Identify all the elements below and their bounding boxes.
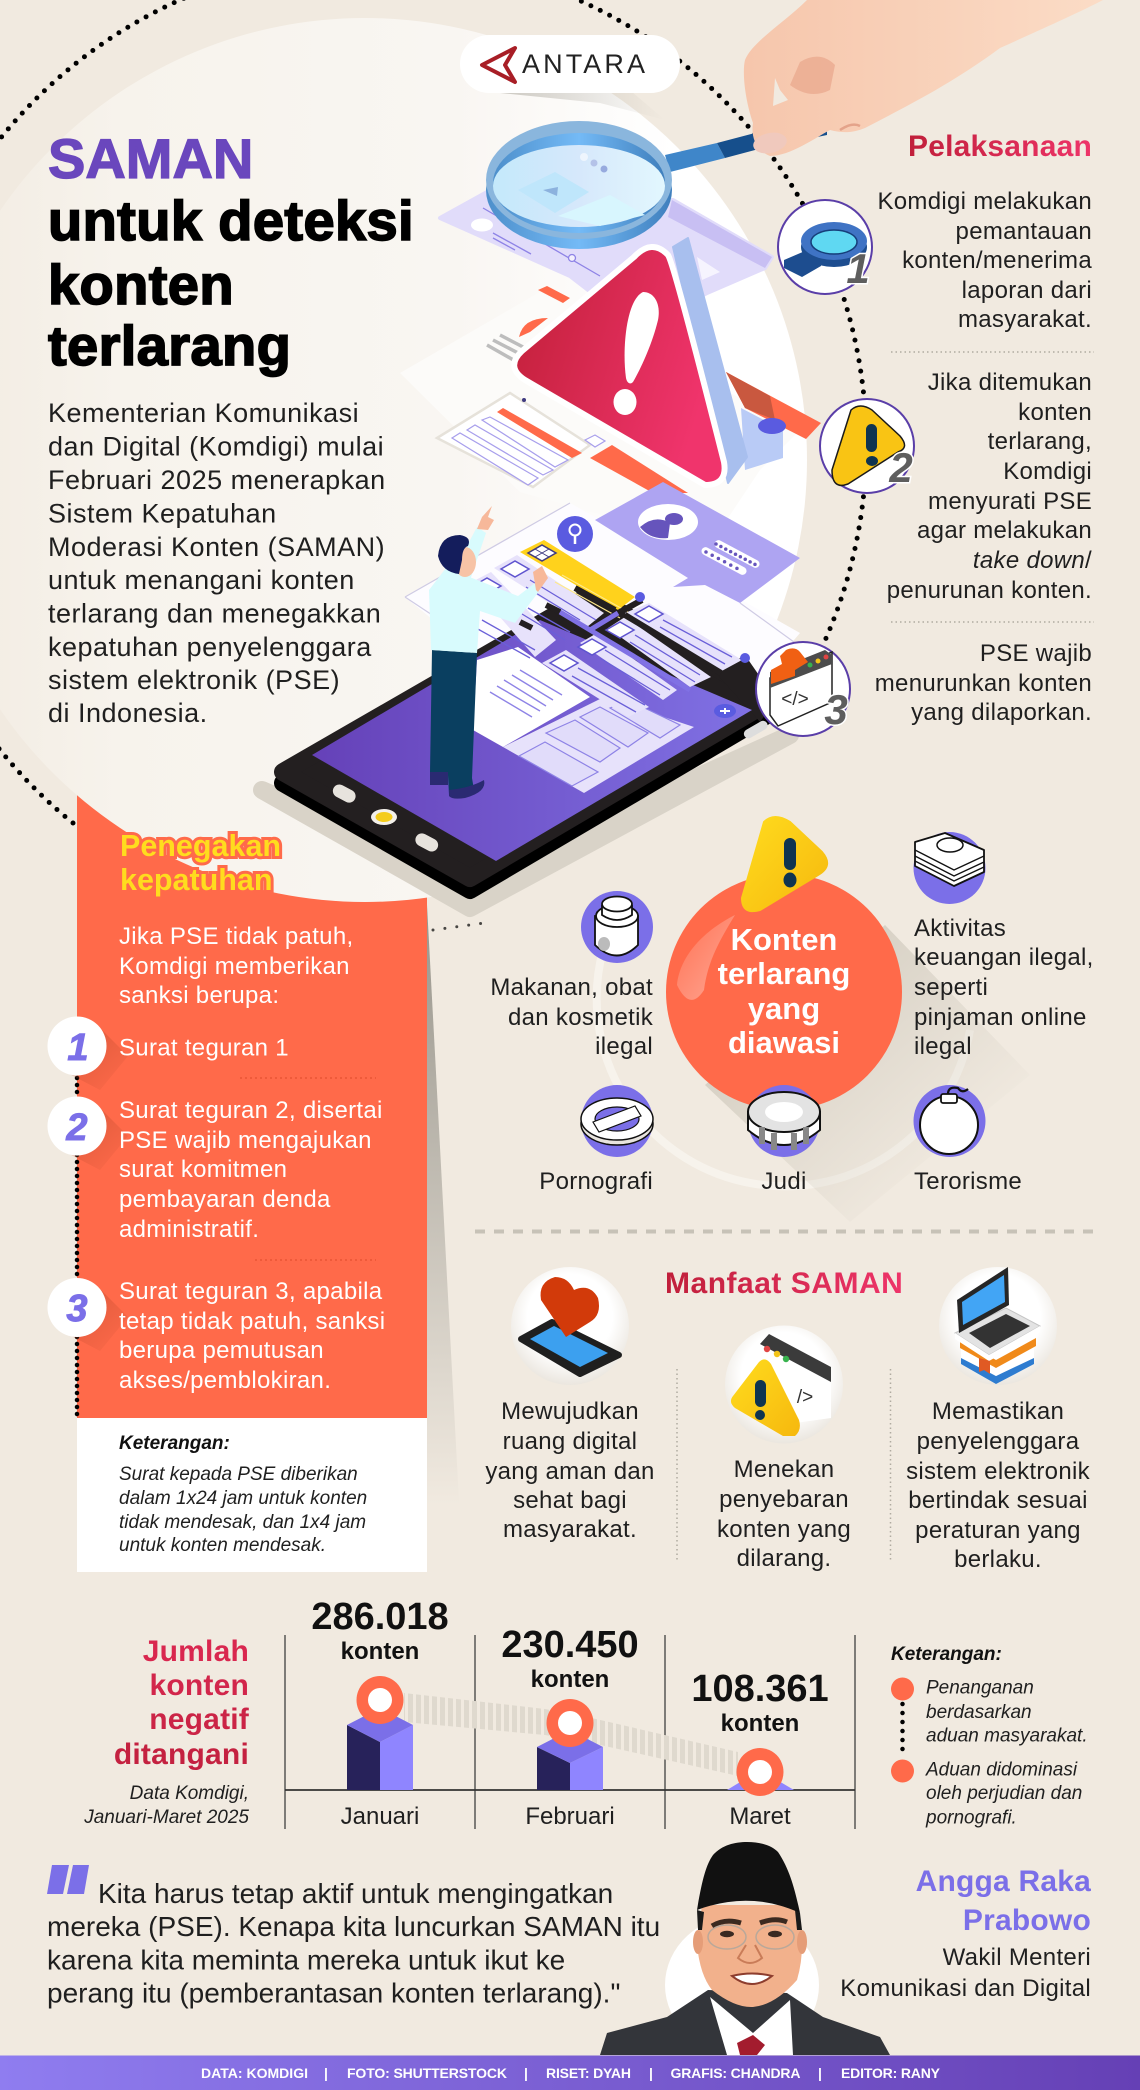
benefit 3: berlaku.: [954, 1546, 1042, 1573]
footer credits: GRAFIS: CHANDRA: [670, 2065, 800, 2081]
bar: maret: [691, 1668, 829, 1830]
text: pelaksanaan step 3: menurunkan konten: [875, 670, 1092, 697]
large light circle behind illustration: [0, 18, 807, 902]
legend: keterangan: oleh perjudian dan: [926, 1783, 1082, 1804]
connectors: [520, 588, 721, 673]
benefit 2: konten yang: [717, 1516, 851, 1543]
benefit 3: [906, 1267, 1091, 1573]
sanction 3: berupa pemutusan: [119, 1337, 324, 1364]
keterangan box: Surat kepada PSE diberikan: [119, 1464, 358, 1485]
intro text block: Februari 2025 menerapkan: [48, 465, 386, 495]
text: pelaksanaan step 2: agar melakukan: [917, 517, 1092, 544]
dotted arc: [0, 0, 866, 930]
heading: penegakan kepatuhan: kepatuhan: [120, 863, 273, 897]
lavender card rows: [470, 555, 742, 717]
logo: ANTARA pill: ANTARA: [522, 49, 648, 79]
sanction 2: PSE wajib mengajukan: [119, 1127, 372, 1154]
illustration: phone, warning and interface layers: [262, 192, 821, 908]
text: pelaksanaan step 1: pemantauan: [956, 218, 1092, 245]
bar: februari: 230.450: [501, 1624, 639, 1666]
icon: step 1 magnifier: [778, 200, 872, 294]
benefit 1: [485, 1267, 655, 1543]
category: judi: [748, 1085, 820, 1195]
footer credits: FOTO: SHUTTERSTOCK: [347, 2065, 507, 2081]
benefit 2: penyebaran: [719, 1486, 849, 1513]
speaker name and role: Angga Raka: [916, 1865, 1091, 1898]
text: pelaksanaan step 3: yang dilaporkan.: [911, 699, 1092, 726]
footer credits: |: [649, 2065, 653, 2081]
keterangan box: tidak mendesak, dan 1x4 jam: [119, 1512, 366, 1533]
phone body: [283, 606, 772, 890]
text: data source: Data Komdigi,: [130, 1783, 249, 1804]
sanction 3: Surat teguran 3, apabila: [119, 1278, 383, 1305]
category: makanan, obat, kosmetik: [490, 891, 654, 1060]
text: pelaksanaan step 3: [875, 640, 1092, 726]
icon: step 3 takedown: 3: [824, 686, 848, 733]
speaker name and role: Prabowo: [963, 1904, 1091, 1937]
legend: keterangan: Aduan didominasi: [925, 1760, 1078, 1780]
central circle: konten terlarang: diawasi: [728, 1025, 840, 1060]
sanction 3: akses/pemblokiran.: [119, 1367, 331, 1394]
category: makanan, obat, kosmetik: Makanan, obat: [490, 974, 653, 1001]
heading: penegakan kepatuhan: [120, 829, 281, 897]
sanction 3: [48, 1278, 385, 1394]
benefit 2: />: [797, 1387, 813, 1408]
text: pelaksanaan step 2: Jika ditemukan: [928, 369, 1092, 396]
text: pelaksanaan step 2: konten: [1018, 399, 1092, 426]
footer credits: EDITOR: RANY: [841, 2065, 941, 2081]
icon: step 3 takedown: [756, 642, 850, 736]
bar: januari: [311, 1596, 449, 1830]
text: pelaksanaan step 3: PSE wajib: [980, 640, 1092, 667]
benefit 2: [717, 1326, 851, 1572]
text: pelaksanaan step 2: [887, 369, 1092, 604]
legend: keterangan: berdasarkan: [926, 1702, 1032, 1723]
legend: keterangan: Keterangan:: [891, 1644, 1002, 1665]
bar: februari: konten: [531, 1666, 609, 1693]
legend: keterangan: [891, 1644, 1088, 1828]
text: data source: [83, 1783, 249, 1828]
category: aktivitas keuangan ilegal: seperti: [914, 974, 988, 1001]
category: aktivitas keuangan ilegal: pinjaman online: [914, 1004, 1087, 1031]
benefit 3: peraturan yang: [915, 1517, 1081, 1544]
text: pelaksanaan step 1: Komdigi melakukan: [877, 188, 1092, 215]
title: konten: [48, 253, 234, 316]
icon: central warning: [742, 817, 827, 911]
sanction 2: administratif.: [119, 1216, 259, 1243]
category: makanan, obat, kosmetik: dan kosmetik: [508, 1004, 654, 1031]
sanction 2: Surat teguran 2, disertai: [119, 1097, 383, 1124]
title: untuk deteksi: [48, 189, 414, 252]
icon: step 3 takedown: </>: [781, 689, 809, 710]
illustration: hand holding magnifier: [744, 0, 1103, 156]
text: pelaksanaan step 1: [877, 188, 1092, 333]
text: pelaksanaan step 1: konten/menerima: [902, 247, 1092, 274]
title: terlarang: [48, 314, 291, 377]
text: data source: Januari-Maret 2025: [83, 1807, 249, 1828]
benefit 3: penyelenggara: [917, 1428, 1080, 1455]
quote text: mereka (PSE). Kenapa kita luncurkan SAMAN itu: [47, 1911, 660, 1942]
title: [48, 127, 414, 377]
central circle: konten terlarang: Konten: [731, 922, 837, 957]
keterangan box: untuk konten mendesak.: [119, 1535, 326, 1556]
text: pelaksanaan step 1: laporan dari: [962, 277, 1092, 304]
floating sheet: [405, 503, 800, 680]
legend: keterangan: Penanganan: [926, 1678, 1034, 1698]
illustration: man pointing: [429, 506, 548, 799]
text: sanksi intro: Komdigi memberikan: [119, 953, 350, 980]
phone shadow: [262, 735, 790, 908]
benefit 2: dilarang.: [737, 1545, 831, 1572]
top lavender sheet: [440, 192, 772, 330]
benefit 1: ruang digital: [503, 1428, 637, 1455]
text: sanksi intro: [119, 923, 353, 1009]
icon: step 2 warning: 2: [888, 444, 913, 491]
chat bubble: [595, 482, 800, 603]
intro text block: di Indonesia.: [48, 698, 208, 728]
quote text: perang itu (pemberantasan konten terlarang).": [47, 1978, 620, 2008]
quote text: karena kita meminta mereka untuk ikut ke: [47, 1944, 565, 1976]
quote text: [47, 1878, 660, 2008]
bar: maret: Maret: [729, 1803, 791, 1830]
benefit 1: yang aman dan: [485, 1458, 655, 1485]
logo: ANTARA pill: [460, 35, 680, 120]
legend: keterangan: pornografi.: [925, 1808, 1017, 1828]
text: pelaksanaan step 2: penurunan konten.: [887, 577, 1092, 604]
bar: maret: 108.361: [691, 1668, 829, 1710]
intro text block: Sistem Kepatuhan: [48, 498, 277, 528]
heading: jumlah konten negatif ditangani: negatif: [149, 1703, 250, 1736]
illustration: magnifying glass: [486, 121, 827, 249]
heading: Pelaksanaan: Pelaksanaan: [908, 130, 1092, 163]
footer credits: DATA: KOMDIGI: [201, 2065, 308, 2081]
bar: februari: [501, 1624, 639, 1830]
keterangan box: [77, 1418, 427, 1572]
benefit 3: sistem elektronik: [906, 1458, 1091, 1485]
screen documents: [473, 647, 590, 747]
orange bands: [590, 445, 688, 493]
text: sanksi intro: sanksi berupa:: [119, 982, 279, 1009]
portrait: Angga Raka Prabowo: [600, 1842, 890, 2055]
speaker name and role: [840, 1865, 1091, 2002]
yellow card: [520, 540, 635, 610]
sanction 2: pembayaran denda: [119, 1186, 331, 1213]
panel: penegakan kepatuhan background: [77, 780, 460, 1572]
keterangan box: dalam 1x24 jam untuk konten: [119, 1488, 367, 1509]
intro text block: dan Digital (Komdigi) mulai: [48, 432, 384, 462]
benefit 1: sehat bagi: [513, 1487, 627, 1514]
category: aktivitas keuangan ilegal: keuangan ilegal,: [914, 944, 1094, 971]
footer credits: |: [324, 2065, 328, 2081]
intro text block: [48, 398, 386, 728]
bar: januari: 286.018: [311, 1596, 449, 1638]
icon: step 2 warning: [820, 399, 914, 493]
text: pelaksanaan step 2: Komdigi: [1003, 458, 1092, 485]
text: pelaksanaan step 2: menyurati PSE: [928, 488, 1092, 515]
bar: maret: konten: [721, 1710, 799, 1737]
text: sanksi intro: Jika PSE tidak patuh,: [119, 923, 353, 950]
intro text block: sistem elektronik (PSE): [48, 665, 340, 695]
intro text block: Moderasi Konten (SAMAN): [48, 532, 385, 562]
diagram: konten terlarang ring and shadow: [597, 925, 1030, 1222]
sanction 3: 3: [66, 1288, 88, 1330]
keterangan box: Keterangan:: [119, 1433, 230, 1454]
quote text: Kita harus tetap aktif untuk mengingatkan: [98, 1878, 613, 1909]
heading: jumlah konten negatif ditangani: konten: [149, 1669, 249, 1702]
heading: jumlah konten negatif ditangani: Jumlah: [143, 1635, 249, 1668]
intro text block: kepatuhan penyelenggara: [48, 632, 372, 662]
bar: januari: konten: [341, 1638, 419, 1665]
category: judi: Judi: [761, 1168, 807, 1195]
category: aktivitas keuangan ilegal: [914, 832, 1094, 1060]
text: pelaksanaan step 2: take down/: [973, 547, 1092, 574]
benefit 1: masyarakat.: [503, 1516, 637, 1543]
benefit 1: Mewujudkan: [501, 1398, 639, 1425]
dotted connector: [75, 1078, 79, 1420]
intro text block: terlarang dan menegakkan: [48, 598, 381, 628]
sanction 2: [48, 1096, 383, 1243]
category: aktivitas keuangan ilegal: ilegal: [914, 1033, 972, 1060]
benefit 3: bertindak sesuai: [908, 1487, 1088, 1514]
bar: februari: Februari: [525, 1803, 615, 1830]
speaker name and role: Komunikasi dan Digital: [840, 1975, 1091, 2002]
title: SAMAN: [48, 127, 253, 190]
footer credits: RISET: DYAH: [546, 2065, 631, 2081]
text: pelaksanaan step 2: terlarang,: [988, 428, 1092, 455]
benefit 3: Memastikan: [932, 1398, 1064, 1425]
speaker name and role: Wakil Menteri: [943, 1944, 1091, 1971]
intro text block: Kementerian Komunikasi: [48, 398, 359, 428]
sanction 1: [48, 1016, 289, 1090]
small document list: [437, 393, 590, 487]
chart: jumlah konten negatif per bulan: [285, 1596, 855, 1830]
category: aktivitas keuangan ilegal: Aktivitas: [914, 915, 1006, 942]
footer credits: [0, 2056, 1140, 2090]
icon: quote mark: [47, 1865, 89, 1894]
sanction 2: surat komitmen: [119, 1156, 287, 1183]
benefit 2: Menekan: [734, 1456, 834, 1483]
sanction 1: Surat teguran 1: [119, 1034, 289, 1062]
bar: januari: Januari: [341, 1803, 419, 1830]
heading: manfaat SAMAN: Manfaat SAMAN: [665, 1267, 903, 1300]
warning slab: [673, 238, 747, 483]
footer credits: |: [524, 2065, 528, 2081]
footer credits: |: [818, 2065, 822, 2081]
category: terorisme: [914, 1085, 1022, 1195]
category: terorisme: Terorisme: [914, 1168, 1022, 1195]
category: pornografi: [539, 1085, 653, 1195]
icon: step 1 magnifier: 1: [846, 245, 870, 292]
sanction 3: tetap tidak patuh, sanksi: [119, 1308, 385, 1335]
intro text block: untuk menangani konten: [48, 565, 355, 595]
category: makanan, obat, kosmetik: ilegal: [595, 1033, 653, 1060]
heading: jumlah konten negatif ditangani: ditangani: [114, 1738, 249, 1771]
legend: keterangan: aduan masyarakat.: [926, 1726, 1088, 1746]
white middle sheet: [400, 292, 800, 560]
central circle: konten terlarang: [666, 874, 902, 1110]
heading: penegakan kepatuhan: Penegakan: [120, 829, 281, 863]
big warning triangle: [514, 247, 725, 485]
sanction 1: 1: [67, 1027, 89, 1069]
central circle: konten terlarang: yang: [748, 991, 820, 1026]
central circle: konten terlarang: terlarang: [718, 956, 850, 991]
sanction 2: 2: [65, 1107, 88, 1149]
heading: jumlah konten negatif ditangani: [114, 1635, 250, 1771]
category: pornografi: Pornografi: [539, 1168, 653, 1195]
text: pelaksanaan step 1: masyarakat.: [958, 306, 1092, 333]
